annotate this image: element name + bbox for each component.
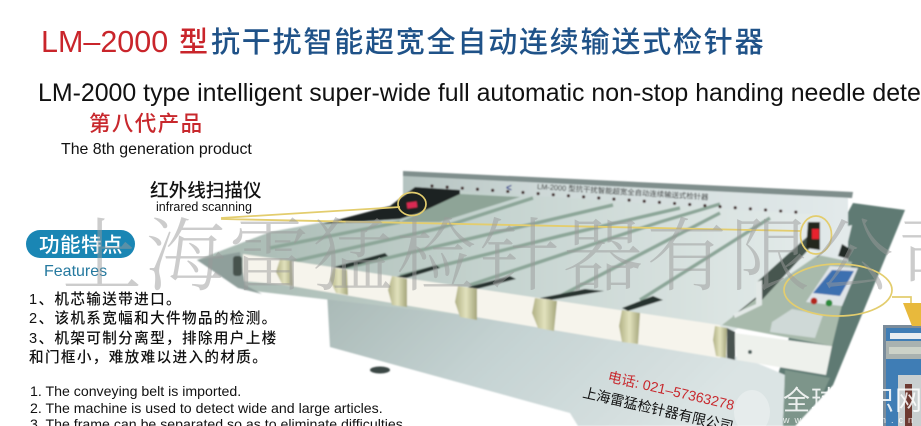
machine right side frame [760,203,905,426]
gantry top edge [403,171,853,198]
title type character: 型 [179,26,208,59]
top plate right [722,255,852,346]
left scanner ring [398,192,426,216]
gantry model label: LM-2000 型抗干扰智能超宽全自动连续输送式检针器 [537,182,709,202]
chinese feature list: 和门框小，难放难以进入的材质。 [29,349,268,366]
rear bed shade [400,194,520,222]
yellow callouts [221,192,921,326]
english feature list: 2. The machine is used to detect wide and large articles. [30,400,383,416]
chinese feature list: 1、机芯输送带进口。 [29,291,182,308]
generation label english: The 8th generation product [61,141,252,158]
machine foot [370,366,390,374]
front roller belts [243,254,727,358]
chinese feature list [29,291,278,366]
right control device photo [883,325,921,426]
site watermark: 全球纺织网 [783,386,921,416]
right sensor housing [806,222,820,250]
conveyor bed [197,188,820,345]
features badge [26,230,135,258]
control panel ring [784,264,892,316]
title chinese in blue: 抗干扰智能超宽全自动连续输送式检针器 [211,26,765,59]
rail flange [733,280,762,318]
site watermark: www.tnc.com.cn [782,415,918,425]
row of gantry dots [432,186,808,213]
dark gaps on belt [330,253,765,320]
gantry brand logo: < [506,183,512,194]
features heading: Features [44,263,107,280]
illustration: needle detector machine [197,171,905,426]
features badge: 功能特点 [39,234,123,257]
bed stripes [270,198,770,300]
right scanner ring [800,216,832,254]
chinese feature list: 2、该机系宽幅和大件物品的检测。 [29,309,278,327]
frame lower block [783,370,830,426]
right sensor LED [812,229,819,239]
dark scanner housing left [322,187,460,224]
gantry frame [403,172,848,300]
title model in red: LM–2000 [41,25,168,59]
guide rail [757,236,810,306]
chinese feature list: 3、机架可制分离型，排除用户上楼 [29,329,278,347]
arrow to device [903,303,921,326]
dark notch [832,225,852,254]
site watermark [734,386,921,426]
english feature list [30,383,403,426]
company phone: 电话: 021–57363278 [606,368,736,413]
english feature list: 1. The conveying belt is imported. [30,383,241,399]
infrared scanner label english: infrared scanning [156,200,252,214]
infrared scanner label chinese: 红外线扫描仪 [150,180,262,201]
left roller end [197,252,262,294]
title [41,25,765,59]
connector to device [892,297,911,320]
machine front panel [327,292,785,426]
end cap [734,333,832,375]
metal nameplate [770,309,823,338]
scanner leader lines [221,207,400,218]
control panel [806,266,858,306]
end cap shadow [727,328,735,360]
generation label chinese: 第八代产品 [89,112,204,136]
left sensor LED [407,201,417,209]
